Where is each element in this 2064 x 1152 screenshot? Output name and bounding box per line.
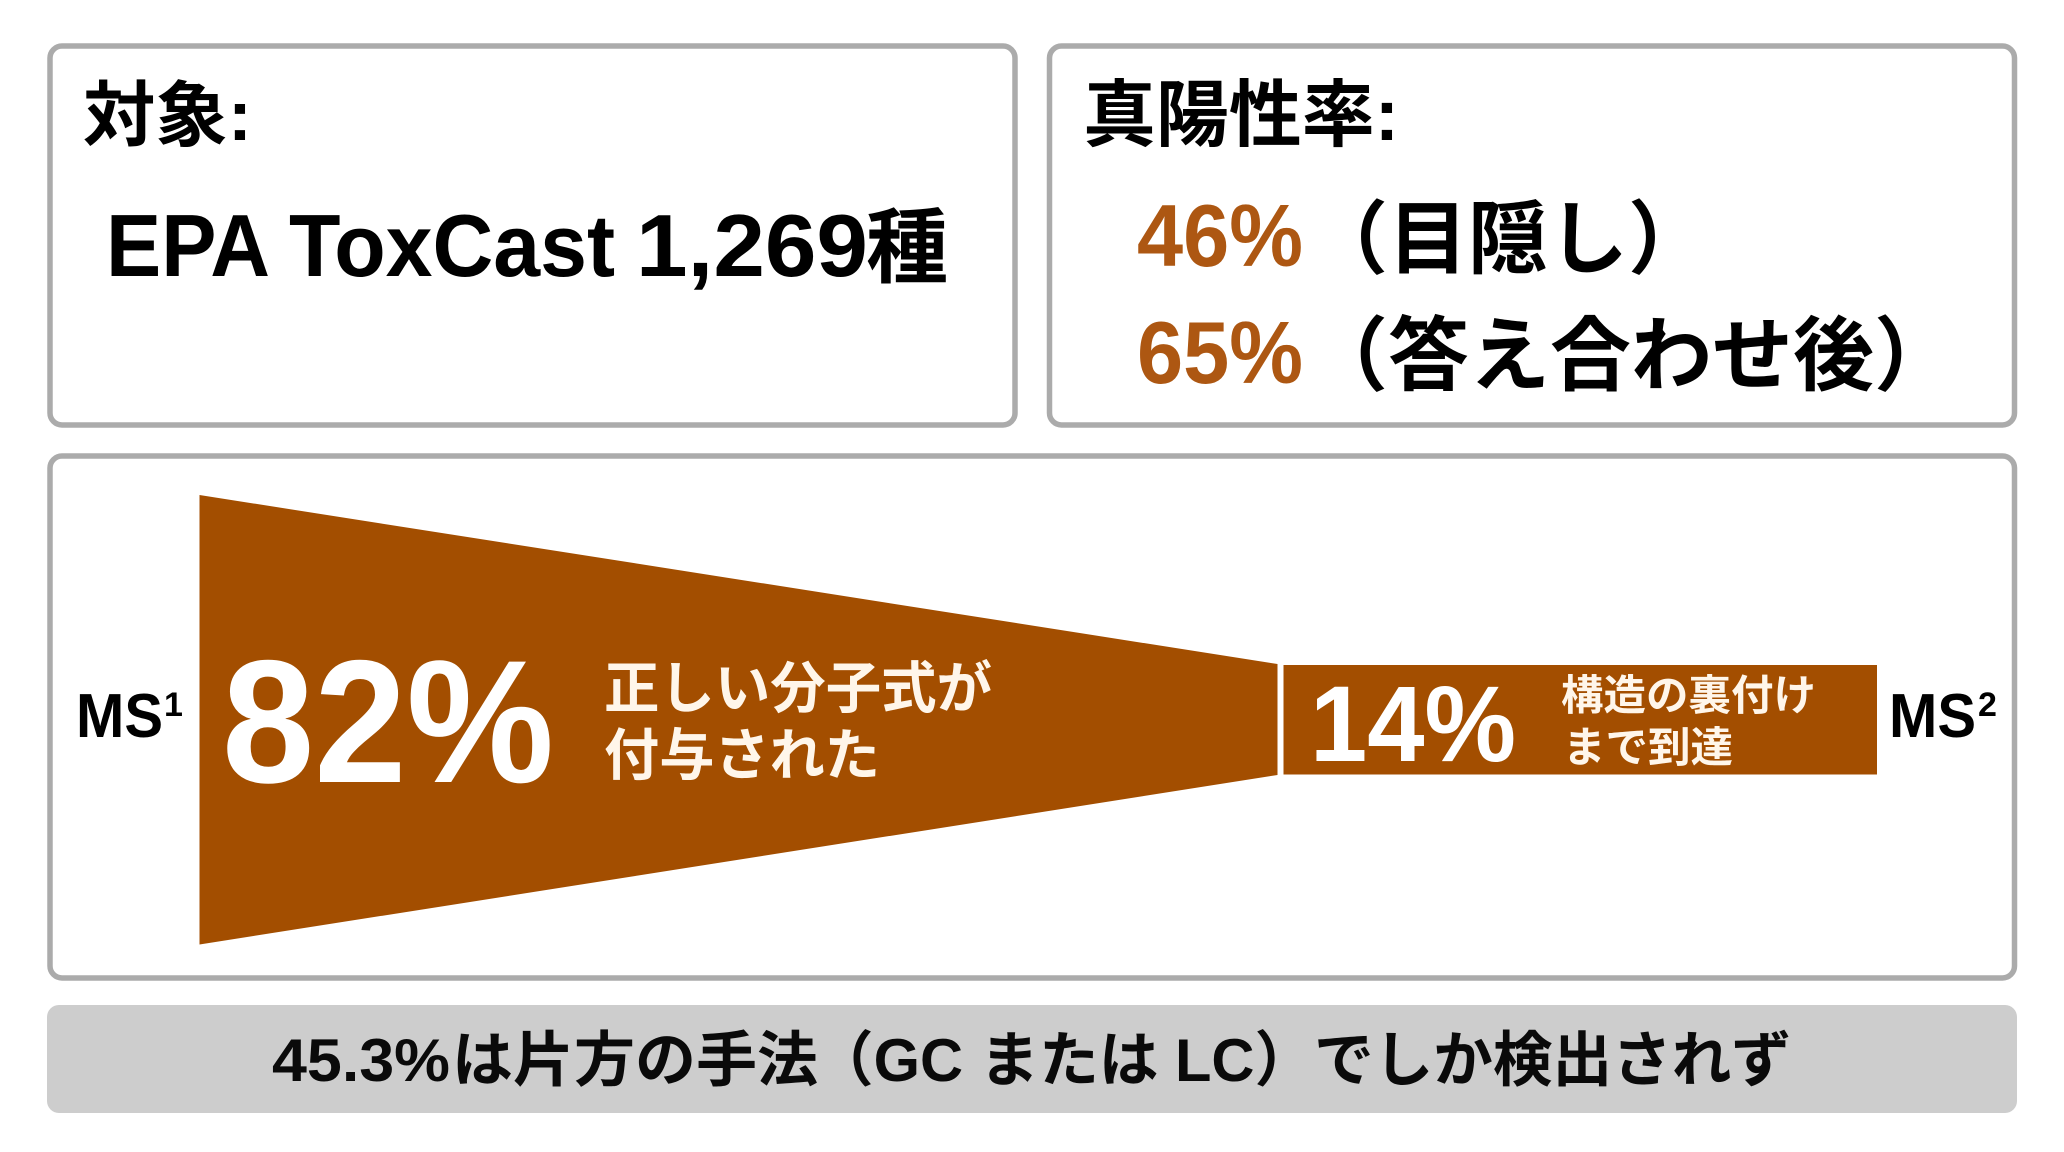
caption: correct formula assigned: 正しい分子式が <box>604 657 992 720</box>
target value <box>106 196 948 295</box>
label: MS2: MS <box>1889 682 1976 751</box>
target value: 1,269 <box>636 196 868 295</box>
label: MS1: MS <box>76 682 163 751</box>
caption: correct formula assigned <box>604 657 992 787</box>
callout text: （GC または LC）でしか検出されず <box>814 1027 1791 1094</box>
callout text: 45.3% <box>272 1027 450 1094</box>
stat: 14%: 14% <box>1310 663 1516 784</box>
label: MS1: 1 <box>164 686 183 724</box>
stat: blinded 46%: （目隠し） <box>1308 195 1708 284</box>
heading: true positive rate: 真陽性率: <box>1083 75 1399 156</box>
stat: after answer check 65%: （答え合わせ後） <box>1307 312 1955 402</box>
funnel: MS2 stage <box>1284 663 1877 784</box>
caption: correct formula assigned: 付与された <box>604 724 880 787</box>
panel: funnel <box>50 456 2014 978</box>
label: MS2: 2 <box>1978 686 1997 724</box>
target value: 種 <box>866 203 948 294</box>
funnel: MS1 stage <box>200 495 1278 944</box>
stat: 82%: 82% <box>222 625 554 820</box>
target value: ToxCast <box>289 196 615 295</box>
target value: EPA <box>106 196 270 295</box>
caption: structure confirmed <box>1561 672 1816 771</box>
callout text: は片方の手法 <box>452 1027 818 1094</box>
panel: true positive rate <box>1050 46 2014 425</box>
stat: after answer check 65%: 65% <box>1137 303 1303 402</box>
callout text <box>272 1027 1791 1094</box>
stat: blinded 46% <box>1137 186 1708 285</box>
heading: target: 対象: <box>83 77 252 156</box>
callout: single method detection <box>47 1005 2017 1113</box>
panel: target <box>50 46 1015 425</box>
stat: blinded 46%: 46% <box>1137 186 1303 285</box>
caption: structure confirmed: まで到達 <box>1563 724 1733 771</box>
caption: structure confirmed: 構造の裏付け <box>1561 672 1816 719</box>
